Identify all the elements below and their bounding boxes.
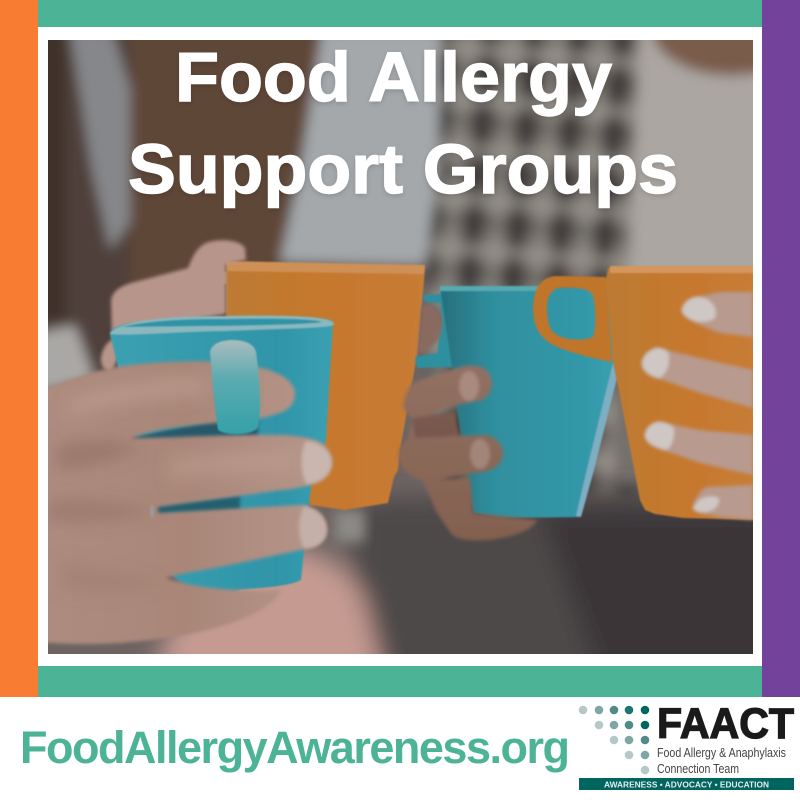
teal bottom bar [38,666,762,697]
website address: FoodAllergyAwareness.org [20,722,570,773]
logo tagline: AWARENESS • ADVOCACY • EDUCATION [604,780,769,790]
centre hand fingers [399,305,537,540]
fingernails left hand [299,441,332,548]
photo illustration: friends clinking mugs [48,40,753,654]
teal mug loop handle over finger [210,340,260,434]
teal mug centre with handle [415,286,617,518]
orange mug left [201,261,425,510]
title line 1: Food Allergy [175,38,612,116]
white photo frame [38,27,762,666]
hand soft shading [49,378,250,581]
title: Food Allergy Support Groups [128,38,678,210]
mug shadows between fingers [128,418,258,516]
teal top bar [38,0,762,27]
back hand holding orange mug [101,240,246,372]
fingernails right hand [642,297,719,512]
wedding ring [150,505,154,517]
logo name line 2: Connection Team [657,761,739,776]
orange mug right with handle [533,266,760,520]
logo wordmark: FAACT [657,700,794,748]
teal mug front [110,316,334,595]
left hand fingers [40,361,332,644]
title line 2: Support Groups [128,130,678,208]
title text shadow [128,40,678,210]
purple side bar [762,0,800,697]
orange side bar [0,0,38,697]
FAACT logo [579,700,794,790]
right hand fingers [642,292,753,520]
title text shadow: Food Allergy [175,40,612,118]
title text shadow: Support Groups [128,132,678,210]
blurred background [48,40,753,654]
logo dot triangle [579,706,649,774]
logo tagline band [579,778,794,790]
